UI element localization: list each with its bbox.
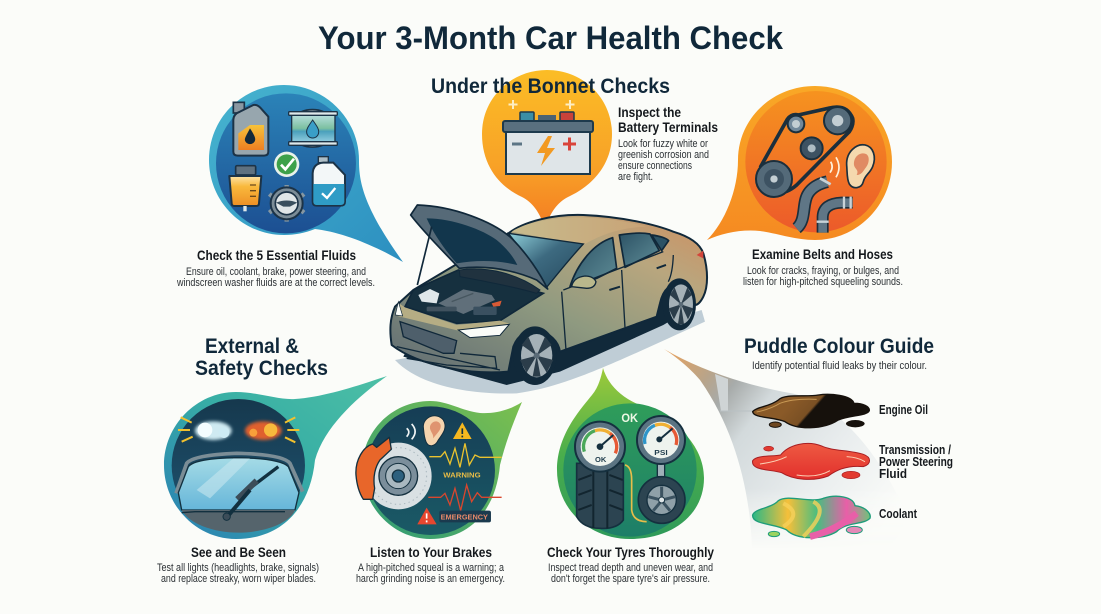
label: transmission / power steering fluid: Fluid	[879, 467, 907, 481]
speech bubble: brakes	[362, 401, 522, 539]
headlights	[395, 302, 509, 338]
text: fluids description: windscreen washer fluids are at the correct levels.	[176, 277, 375, 289]
text: fluids description	[176, 266, 375, 289]
icons: five fluids	[216, 93, 356, 233]
roof	[512, 217, 647, 245]
front wheel	[513, 326, 557, 385]
icon: gauges and tyre: OK	[595, 457, 606, 464]
text: belts description: Look for cracks, fraying, or bulges, and	[747, 265, 899, 277]
front slam panel	[397, 304, 510, 331]
icon: brake disc, ear and sound waves	[356, 406, 502, 535]
speech bubble: battery	[482, 70, 612, 229]
text: brakes description	[356, 562, 505, 585]
panel: puddle colour guide	[664, 335, 953, 548]
side windows	[570, 233, 669, 287]
icon: gauges and tyre: PSI	[654, 450, 668, 457]
icon: brake disc, ear and sound waves: EMERGENCY	[441, 513, 488, 522]
heading: examine belts and hoses: Examine Belts and Hoses	[752, 247, 893, 262]
text: tyres description: Inspect tread depth and uneven wear, and	[548, 562, 713, 574]
wheel arches shadow	[403, 277, 697, 385]
text: brakes description: harch grinding noise is an emergency.	[356, 573, 505, 585]
car shadow	[395, 310, 705, 394]
lower bumper	[397, 347, 500, 370]
heading: inspect the battery terminals	[618, 105, 718, 135]
icons: belts, ear and hoses	[745, 91, 887, 233]
text: lights description: Test all lights (headlights, brake, signals)	[157, 562, 319, 574]
icon: gauges and tyre	[563, 403, 697, 537]
text: battery description: ensure connections	[618, 160, 692, 172]
panel: check the 5 essential fluids	[176, 85, 403, 289]
heading: listen to your brakes: Listen to Your Brakes	[370, 545, 492, 560]
puddle: coolant	[753, 496, 870, 538]
text: lights description: and replace streaky, worn wiper blades.	[161, 573, 316, 585]
heading: under the bonnet checks: Under the Bonnet Checks	[431, 74, 670, 98]
label: coolant: Coolant	[879, 507, 918, 521]
heading: inspect the battery terminals: Battery Terminals	[618, 120, 718, 135]
label: transmission / power steering fluid: Power Steering	[879, 455, 953, 469]
heading: inspect the battery terminals: Inspect the	[618, 105, 681, 120]
car body	[390, 215, 707, 372]
door lines	[562, 252, 673, 350]
panel: inspect the battery terminals	[431, 70, 718, 229]
speech bubble: belts	[707, 86, 892, 240]
puddle: engine oil	[753, 394, 869, 428]
text: belts description: listen for high-pitched squeeling sounds.	[743, 276, 903, 288]
text: belts description	[743, 265, 903, 288]
open bonnet	[411, 205, 548, 293]
car illustration	[390, 205, 707, 394]
text: tyres description: don't forget the spare tyre's air pressure.	[551, 573, 710, 585]
text: fluids description: Ensure oil, coolant, brake, power steering, and	[186, 266, 366, 278]
speech bubble: fluids	[209, 85, 403, 262]
section heading: external and safety checks: External &	[205, 335, 299, 358]
title: Your 3-Month Car Health Check	[318, 20, 783, 56]
heading: check the 5 essential fluids: Check the 5 Essential Fluids	[197, 248, 356, 263]
icon: brake disc, ear and sound waves: WARNING	[443, 470, 481, 479]
label: transmission / power steering fluid: Transmission /	[879, 443, 951, 457]
panel: examine belts and hoses	[707, 86, 903, 288]
text: brakes description: A high-pitched squeal is a warning; a	[358, 562, 504, 574]
mirror and handles	[572, 251, 703, 290]
speech bubble: tyres	[557, 368, 704, 539]
panel: listen to your brakes	[356, 401, 522, 585]
section heading: external and safety checks	[195, 335, 328, 380]
panel: check your tyres thoroughly	[547, 368, 714, 585]
heading: check your tyres thoroughly: Check Your Tyres Thoroughly	[547, 545, 714, 560]
puddle: transmission fluid	[753, 443, 870, 479]
floor line	[720, 410, 790, 412]
heading: puddle colour guide: Puddle Colour Guide	[744, 335, 934, 358]
text: puddle intro: Identify potential fluid leaks by their colour.	[752, 360, 927, 372]
icon: car battery	[503, 100, 593, 174]
text: tyres description	[548, 562, 713, 585]
engine bay	[405, 270, 543, 323]
icon: lights and wiper	[172, 399, 305, 533]
text: battery description: Look for fuzzy white or	[618, 138, 708, 150]
label: engine oil: Engine Oil	[879, 403, 928, 417]
text: lights description	[157, 562, 319, 585]
section heading: external and safety checks: Safety Checks	[195, 357, 328, 380]
panel: see and be seen	[157, 376, 387, 585]
label: transmission / power steering fluid	[879, 443, 953, 481]
rear wheel	[663, 278, 696, 330]
text: battery description: greenish corrosion and	[618, 149, 709, 161]
wedge: garage floor pointer	[664, 349, 882, 528]
icon: gauges and tyre: OK	[621, 411, 638, 425]
text: battery description: are fight.	[618, 171, 653, 183]
grille	[400, 322, 457, 353]
speech bubble: lights	[164, 376, 387, 539]
windscreen	[508, 233, 583, 287]
garage wall column	[715, 374, 728, 411]
heading: see and be seen: See and Be Seen	[191, 545, 286, 560]
text: battery description	[618, 138, 709, 183]
